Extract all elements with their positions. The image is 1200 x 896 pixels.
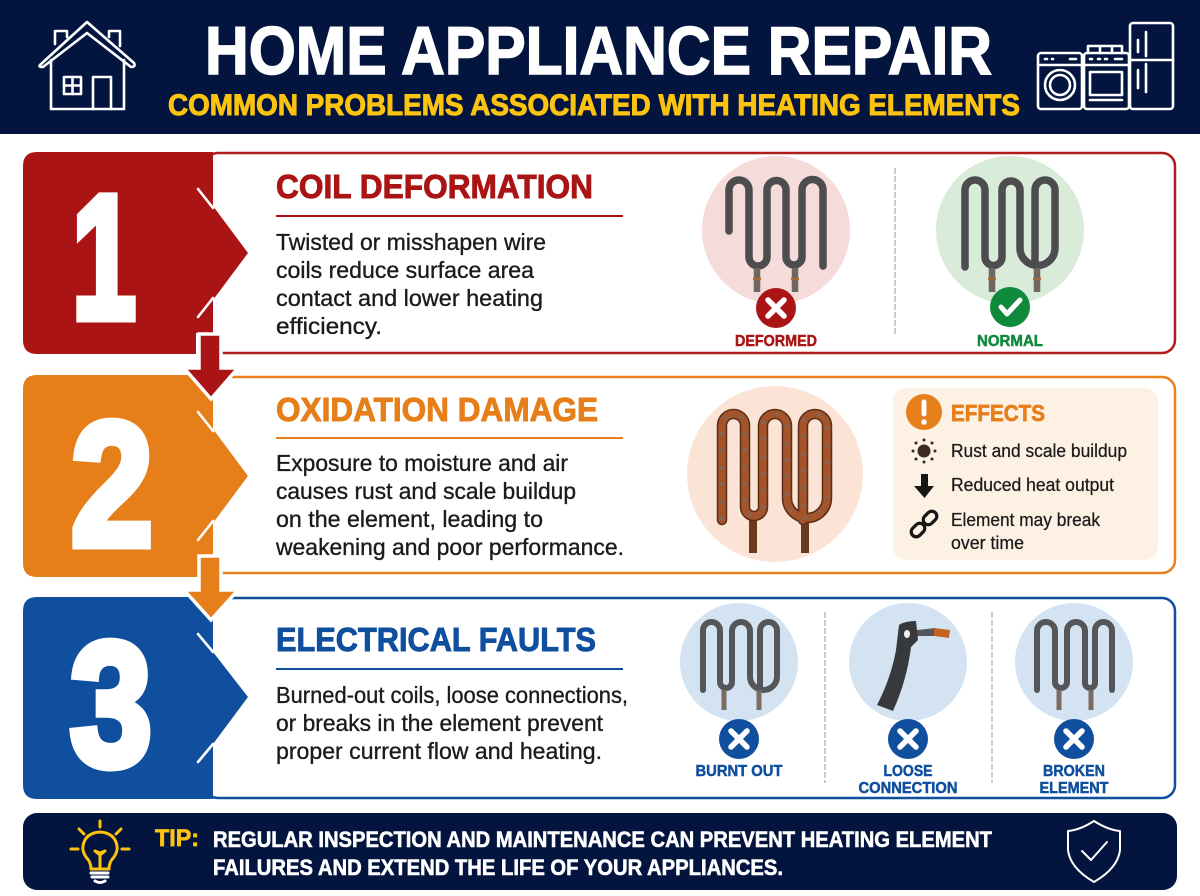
tip bar (23, 813, 1177, 890)
description: or breaks in the element prevent (276, 710, 604, 736)
broken element: ELEMENT (1040, 780, 1109, 797)
icon: appliances (1038, 23, 1173, 109)
description (275, 450, 624, 560)
description: Twisted or misshapen wire (276, 229, 546, 255)
effects box: over time (951, 533, 1024, 553)
panel frame (205, 377, 1175, 573)
loose connection element (849, 603, 967, 797)
effects box (893, 388, 1158, 560)
description: weakening and poor performance. (275, 534, 624, 560)
icon: light bulb (71, 821, 129, 882)
number block (23, 152, 248, 356)
description: on the element, leading to (276, 506, 543, 532)
icon: cross badge (1054, 719, 1094, 759)
heading: ELECTRICAL FAULTS (276, 621, 596, 658)
tip text (155, 825, 993, 880)
icon: house (39, 22, 135, 109)
description (276, 229, 546, 339)
rusted element (687, 386, 863, 562)
description: efficiency. (276, 313, 382, 339)
icon: warning (906, 394, 942, 430)
panel 3: electrical faults (23, 597, 1175, 803)
normal element (936, 156, 1084, 350)
deformed element: DEFORMED (735, 333, 817, 350)
number block (23, 597, 248, 803)
icon: broken link (909, 509, 939, 539)
icon: shield (1068, 821, 1120, 882)
loose connection element: CONNECTION (858, 780, 958, 797)
description: Exposure to moisture and air (276, 450, 568, 476)
description: proper current flow and heating. (276, 738, 602, 764)
title: HOME APPLIANCE REPAIR (205, 13, 992, 89)
number block (23, 375, 248, 583)
arrow: step 1 to 2 (184, 334, 238, 399)
burnt out element (680, 603, 798, 780)
icon: cross badge (888, 719, 928, 759)
description: Burned-out coils, loose connections, (276, 682, 628, 708)
number block: 3 (70, 607, 152, 803)
effects box: Rust and scale buildup (951, 441, 1127, 461)
icon: cross badge (719, 719, 759, 759)
icon: cross badge (756, 288, 796, 328)
tip text: FAILURES AND EXTEND THE LIFE OF YOUR APPLIANCES. (213, 855, 783, 880)
icon: check badge (990, 287, 1030, 327)
panel frame (205, 598, 1175, 798)
panel frame (205, 153, 1175, 353)
subtitle: COMMON PROBLEMS ASSOCIATED WITH HEATING ELEMENTS (168, 89, 1020, 122)
panel 2: oxidation damage (23, 375, 1175, 583)
number block: 2 (71, 387, 153, 583)
tip text: REGULAR INSPECTION AND MAINTENANCE CAN PREVENT HEATING ELEMENT (213, 827, 993, 852)
header banner (0, 0, 1200, 134)
panel 1: coil deformation (23, 152, 1175, 356)
description: contact and lower heating (276, 285, 543, 311)
deformed element (702, 156, 850, 350)
heading: COIL DEFORMATION (276, 168, 593, 205)
arrow: step 2 to 3 (184, 556, 238, 620)
normal element: NORMAL (977, 333, 1043, 350)
broken element (1015, 603, 1133, 797)
effects box: EFFECTS (951, 400, 1045, 426)
number block: 1 (72, 160, 136, 356)
icon: down arrow (914, 474, 934, 498)
description: coils reduce surface area (276, 257, 534, 283)
burnt out element: BURNT OUT (696, 763, 783, 780)
heading: OXIDATION DAMAGE (276, 391, 598, 428)
description (276, 682, 628, 764)
broken element: BROKEN (1043, 763, 1105, 780)
loose connection element: LOOSE (884, 763, 933, 780)
tip text: TIP: (155, 825, 199, 852)
description: causes rust and scale buildup (276, 478, 576, 504)
icon: rust (912, 438, 936, 464)
effects box: Reduced heat output (951, 475, 1114, 495)
effects box: Element may break (951, 510, 1101, 530)
